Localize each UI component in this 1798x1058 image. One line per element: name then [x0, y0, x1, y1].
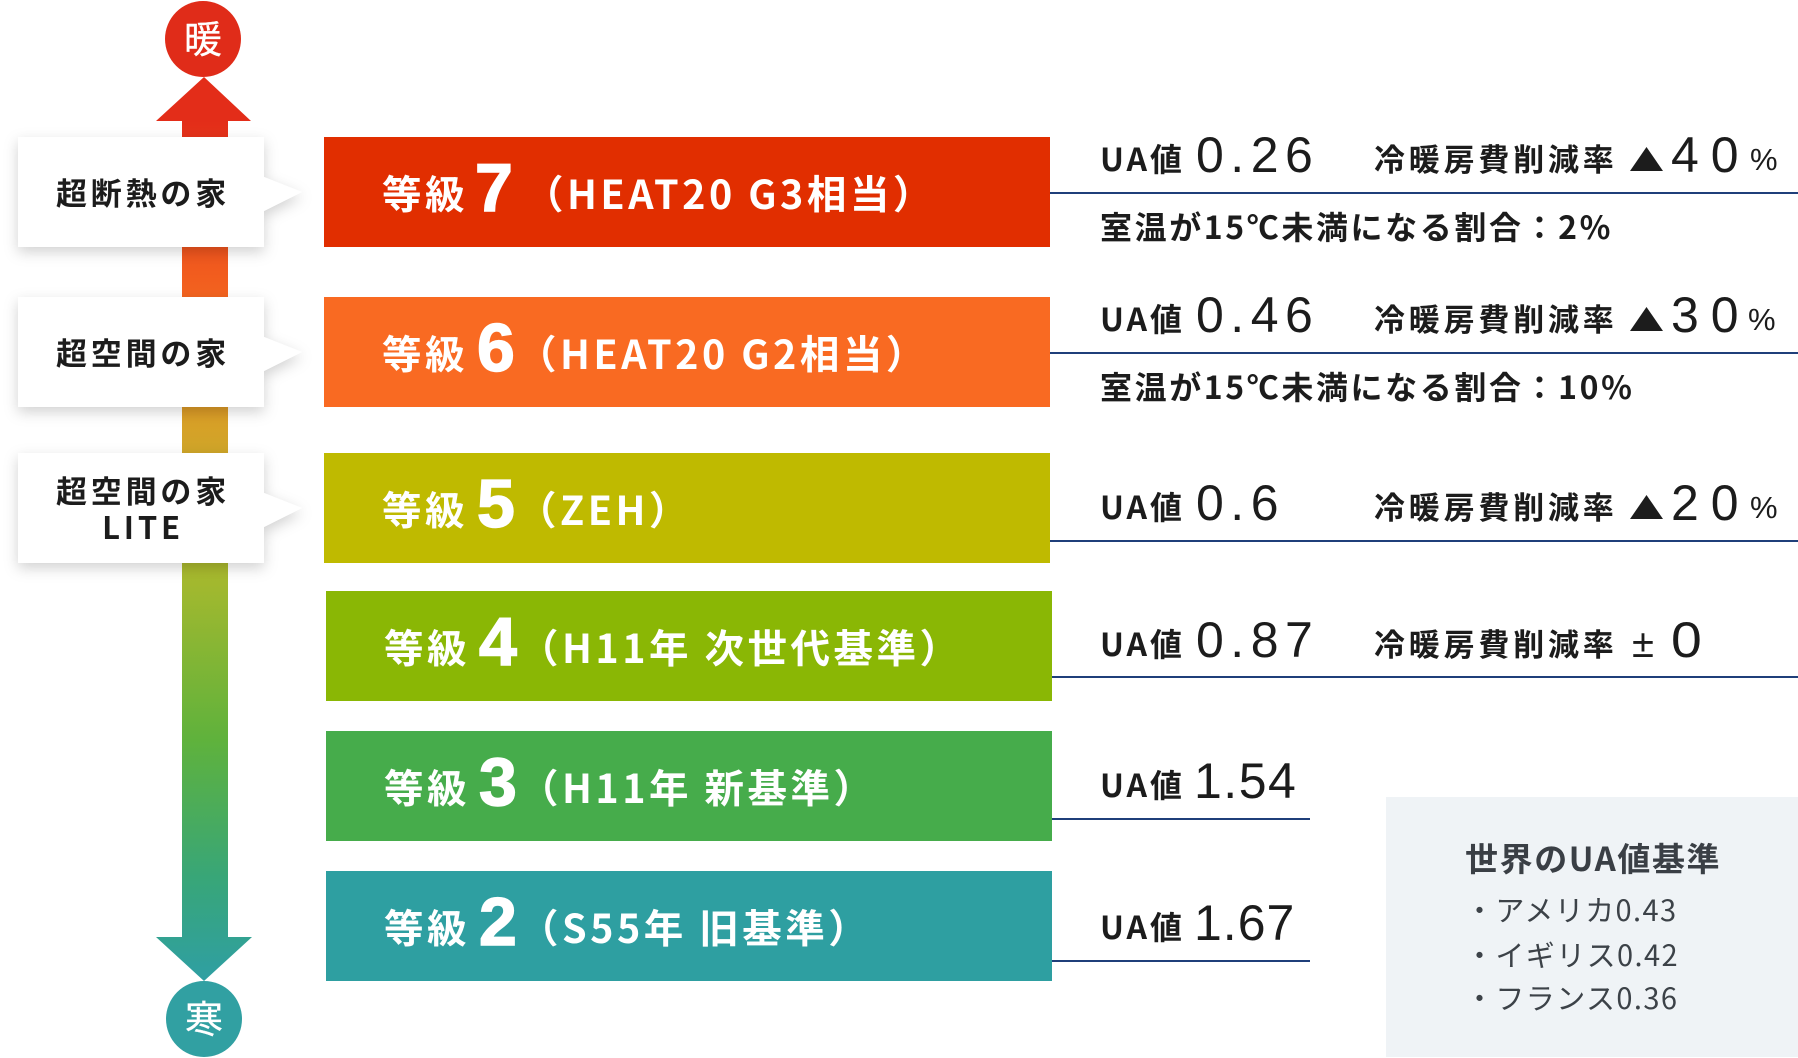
- stats: grade 6: 0.46: [1196, 287, 1319, 343]
- icon: warm circle: 暖: [184, 9, 222, 64]
- callout: 超空間の家: 超空間の家: [56, 329, 230, 374]
- panel: grade 3 bar: （H11年 新基準）: [519, 758, 876, 815]
- panel: grade 4 bar: 等級: [384, 618, 470, 675]
- panel: grade 7 bar: 等級: [382, 164, 468, 221]
- panel: grade 2 bar: 2: [479, 884, 517, 960]
- stats: grade 2: [1052, 895, 1310, 962]
- panel: grade 7 bar: 7: [475, 150, 513, 226]
- icon: warm circle: [165, 1, 241, 77]
- panel: grade 5 bar: （ZEH）: [517, 480, 692, 537]
- panel: grade 3 bar: 等級: [384, 758, 470, 815]
- callout: 超断熱の家: 超断熱の家: [56, 169, 230, 214]
- panel: grade 7 bar: [324, 137, 1050, 247]
- stats: grade 6: UA値: [1100, 295, 1185, 341]
- list: [1465, 888, 1679, 1018]
- icon: cold circle: [166, 981, 242, 1057]
- callout: 超空間の家 LITE: 超空間の家: [56, 467, 230, 512]
- stats: grade 4: 0: [1671, 612, 1709, 668]
- stats: grade 5: %: [1750, 490, 1778, 525]
- stats: grade 5: 20: [1671, 475, 1751, 531]
- stats: grade 7: 冷暖房費削減率: [1374, 135, 1618, 180]
- callout: 超空間の家 LITE: [18, 453, 302, 563]
- panel: grade 7 bar: （HEAT20 G3相当）: [524, 164, 936, 221]
- stats: grade 5: 0.6: [1196, 475, 1285, 531]
- panel: grade 3 bar: 3: [479, 744, 517, 820]
- stats: grade 3: 1.54: [1194, 753, 1297, 809]
- stats: grade 6: 室温が15℃未満になる割合：10%: [1100, 363, 1635, 409]
- stats: grade 6: 30: [1671, 287, 1751, 343]
- stats: grade 7: 40: [1671, 127, 1751, 183]
- stats: grade 4: 冷暖房費削減率: [1374, 620, 1618, 665]
- stats: grade 6: 冷暖房費削減率: [1374, 295, 1618, 340]
- callout: 超断熱の家: [18, 137, 302, 247]
- stats: grade 7: 室温が15℃未満になる割合：2%: [1100, 203, 1613, 249]
- panel: grade 2 bar: （S55年 旧基準）: [519, 898, 871, 955]
- callout: 超空間の家: [18, 297, 302, 407]
- panel: grade 5 bar: 5: [477, 466, 515, 542]
- stats: grade 5: 冷暖房費削減率: [1374, 483, 1618, 528]
- panel: grade 2 bar: 等級: [384, 898, 470, 955]
- stats: grade 6: [1050, 287, 1798, 409]
- thermal scale arrow: [156, 1, 252, 1057]
- stats: grade 6: %: [1748, 302, 1776, 337]
- callout: 超空間の家 LITE: LITE: [102, 503, 184, 548]
- stats: grade 4: [1052, 612, 1798, 678]
- stats: grade 5: UA値: [1100, 483, 1185, 529]
- stats: grade 3: [1052, 753, 1310, 820]
- panel: world UA standards: [1386, 797, 1798, 1057]
- panel: grade 5 bar: [324, 453, 1050, 563]
- panel: grade 5 bar: 等級: [382, 480, 468, 537]
- panel: grade 6 bar: [324, 297, 1050, 407]
- stats: grade 2: UA値: [1100, 903, 1185, 949]
- list: ・アメリカ0.43: [1465, 888, 1678, 930]
- stats: grade 7: [1050, 127, 1798, 249]
- stats: grade 4: UA値: [1100, 620, 1185, 666]
- heading: 世界のUA値基準: [1465, 833, 1721, 881]
- arrow: gradient double arrow: [156, 77, 252, 981]
- panel: grade 2 bar: [326, 871, 1052, 981]
- list: ・フランス0.36: [1465, 976, 1678, 1018]
- panel: grade 6 bar: 等級: [382, 324, 468, 381]
- list: ・イギリス0.42: [1465, 933, 1679, 975]
- stats: grade 3: UA値: [1100, 761, 1185, 807]
- panel: grade 4 bar: 4: [479, 604, 517, 680]
- stats: grade 7: UA値: [1100, 135, 1185, 181]
- stats: grade 7: %: [1750, 142, 1778, 177]
- panel: grade 4 bar: [326, 591, 1052, 701]
- stats: grade 4: ±: [1632, 622, 1654, 666]
- stats: grade 2: 1.67: [1194, 895, 1295, 951]
- panel: grade 3 bar: [326, 731, 1052, 841]
- panel: grade 6 bar: 6: [477, 310, 515, 386]
- stats: grade 4: 0.87: [1196, 612, 1319, 668]
- stats: grade 7: 0.26: [1196, 127, 1319, 183]
- stats: grade 5: [1050, 475, 1798, 542]
- icon: cold circle: 寒: [185, 989, 223, 1044]
- panel: grade 6 bar: （HEAT20 G2相当）: [517, 324, 929, 381]
- panel: grade 4 bar: （H11年 次世代基準）: [519, 618, 962, 675]
